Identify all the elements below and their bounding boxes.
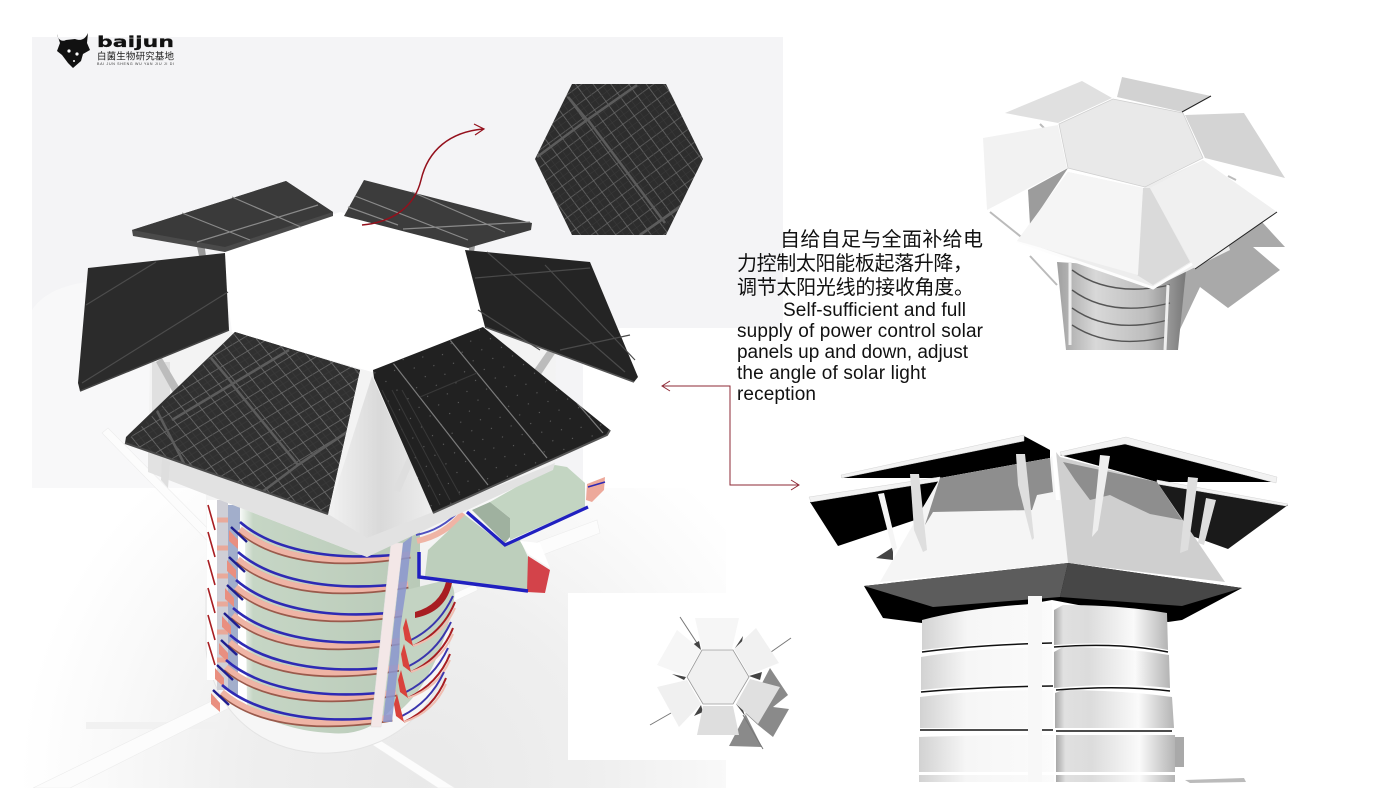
underside black	[864, 563, 1242, 623]
Chinese description	[737, 228, 983, 299]
arrow: curved callout to close-up	[362, 124, 484, 225]
panel left	[983, 125, 1067, 210]
panel front left	[1017, 172, 1143, 275]
front elevation view	[809, 435, 1288, 783]
panel right	[1185, 113, 1285, 178]
back left lower panel	[810, 480, 940, 546]
logo pinyin: BAI JUN SHENG WU YAN JIU JI DI	[97, 62, 174, 66]
roof fold	[1137, 188, 1190, 285]
panel front right	[1150, 160, 1277, 269]
shadows	[729, 668, 789, 747]
extended tray: lower	[419, 515, 550, 593]
plan panel right	[736, 679, 780, 724]
English description: the angle of solar light	[737, 363, 927, 384]
dark roof recess	[1028, 168, 1068, 225]
solar panel: front left	[120, 325, 365, 520]
roof right shadow	[1063, 462, 1182, 520]
English description: supply of power control solar	[737, 321, 984, 342]
English description: Self-sufficient and full	[783, 300, 966, 321]
right floors	[1054, 605, 1175, 782]
panel top left	[1005, 81, 1112, 123]
struts	[990, 124, 1236, 285]
roof plate edge	[1017, 241, 1195, 288]
solar panel: top left	[132, 181, 333, 252]
logo wordmark: baijun	[97, 33, 174, 51]
floor gaps	[920, 643, 1172, 731]
upper arc behind trays	[417, 513, 463, 541]
top-right white model view	[983, 77, 1285, 350]
logo Chinese name: 白菌生物研究基地	[97, 50, 174, 62]
hexagon solar texture close-up	[535, 84, 703, 235]
Chinese description: 自给自足与全面补给电	[780, 228, 983, 251]
tower base ring	[206, 590, 450, 753]
right-hand lower floors	[394, 580, 455, 722]
plan panel upper left	[657, 630, 701, 676]
panel struts	[156, 240, 556, 492]
roof right face	[1056, 452, 1225, 582]
side box	[1175, 737, 1184, 767]
solar panel: top centre	[344, 180, 532, 248]
English description: panels up and down, adjust	[737, 342, 969, 363]
panel edge	[1182, 96, 1277, 269]
panel top	[1117, 77, 1211, 112]
back panel left	[841, 436, 1050, 478]
floor bands	[211, 522, 410, 724]
plan panel top	[695, 618, 739, 649]
right post	[371, 543, 403, 727]
hub joints	[672, 636, 762, 716]
main tower illustration	[33, 180, 638, 788]
back right panel left wing	[1157, 482, 1288, 549]
icon: bull head	[57, 33, 90, 68]
far-left floors	[207, 500, 228, 690]
panel: white inset behind plan view	[568, 593, 728, 760]
roof ridge highlight	[1052, 452, 1060, 500]
English description	[737, 300, 984, 405]
plan panel upper right	[734, 628, 779, 675]
plan hex	[687, 650, 749, 704]
panel top edges	[809, 435, 1288, 506]
ground sliver	[1185, 778, 1246, 783]
extended tray: upper	[467, 465, 605, 545]
solar panel: front right	[373, 327, 610, 513]
panel: light grey backdrop	[32, 37, 783, 488]
Chinese description: 力控制太阳能板起落升降，	[737, 252, 973, 275]
pipes	[33, 428, 600, 788]
back panel right	[1060, 444, 1276, 482]
left floors	[919, 603, 1054, 782]
roof plate	[1017, 160, 1230, 288]
small shadow piece	[876, 547, 893, 560]
plan panel bottom	[697, 706, 739, 735]
plan panel lower left	[657, 680, 701, 727]
cast shadow	[1150, 222, 1285, 350]
fascia right	[1060, 563, 1242, 606]
roof body and fascia	[148, 330, 556, 557]
left white post	[228, 505, 247, 705]
right post blue panels	[383, 536, 412, 722]
cylinder body	[206, 495, 420, 733]
panel: ground plane with soft shadow	[0, 488, 726, 788]
arrow: connector from text to views	[662, 381, 799, 490]
Chinese description: 调节太阳光线的接收角度。	[737, 276, 974, 299]
description text	[737, 228, 984, 405]
solar panel: right	[465, 250, 638, 382]
logo eyes	[67, 49, 79, 62]
arc blue line	[416, 510, 460, 535]
plan view of roof	[650, 617, 791, 749]
roof left shadow	[925, 458, 1053, 525]
fascia left	[864, 563, 1068, 607]
center hex	[1059, 99, 1203, 187]
cylinder	[1057, 262, 1186, 350]
roof struts	[878, 454, 1216, 553]
English description: reception	[737, 384, 816, 405]
roof left face	[880, 452, 1068, 582]
centre post	[1028, 596, 1042, 782]
thin masts	[650, 617, 791, 749]
logo	[57, 33, 174, 68]
centre hexagon opening	[222, 212, 487, 372]
solar panel: left	[78, 253, 229, 391]
panel: lighter glow on backdrop	[32, 280, 240, 488]
